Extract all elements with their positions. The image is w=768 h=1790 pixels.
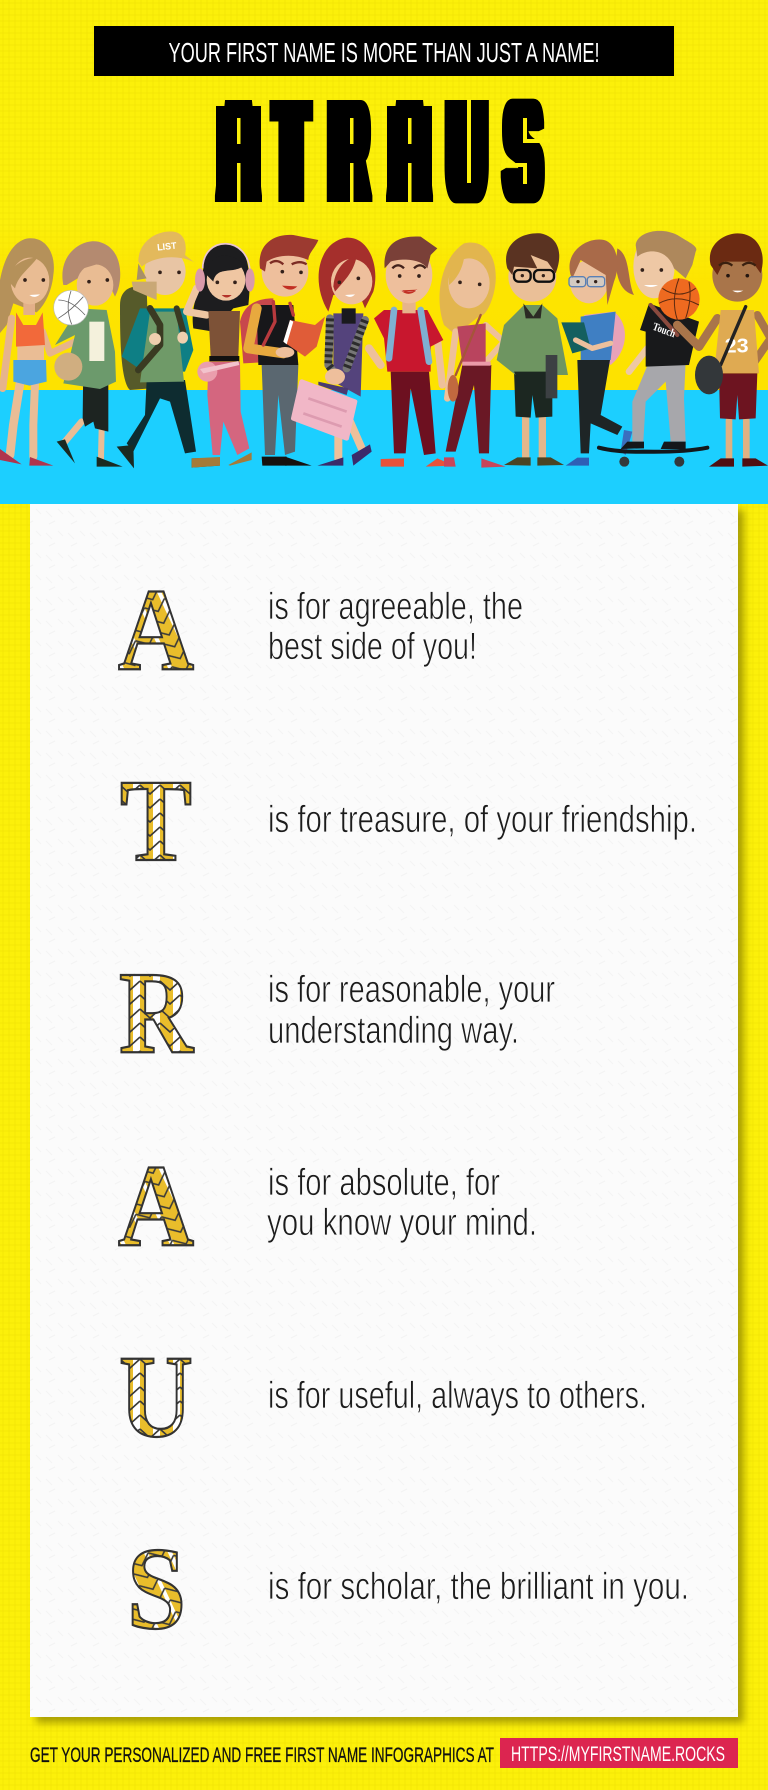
person: boy in red shirt <box>369 236 454 467</box>
white content panel <box>30 504 738 1717</box>
row: U <box>119 1331 647 1462</box>
text: reasonable: is for reasonable, your <box>268 969 555 1011</box>
white panel shadow <box>36 510 744 1723</box>
text: agreeable: is for agreeable, the <box>268 586 523 628</box>
footer link button <box>500 1738 738 1768</box>
row: S <box>127 1523 689 1654</box>
letter icon: R: R <box>119 947 195 1078</box>
blue band top cover <box>0 480 768 504</box>
person: boy on skateboard with basketball: Touch <box>651 321 677 340</box>
person: girl in orange top <box>0 238 78 466</box>
text: you know: you know your mind. <box>267 1202 537 1244</box>
left group of people <box>0 232 375 468</box>
row: T <box>120 755 697 886</box>
person: boy on skateboard with basketball <box>599 231 707 467</box>
text: useful: is for useful, always to others. <box>268 1375 647 1417</box>
text: best side: best side of you! <box>268 626 477 668</box>
row: A second <box>118 1140 537 1271</box>
text: understanding: understanding way. <box>268 1010 519 1052</box>
text: absolute: is for absolute, for <box>268 1162 500 1204</box>
blue floor band <box>0 390 768 504</box>
letter icon: A: A <box>118 564 194 695</box>
header banner <box>94 26 674 76</box>
row: A <box>118 564 523 695</box>
letter icon: T: T <box>120 755 192 886</box>
letter icon: S: S <box>127 1523 186 1654</box>
person: boy with book <box>240 235 325 466</box>
title: name: ATRAUS <box>224 73 537 229</box>
person: boy in tan jersey: 23 <box>725 334 749 357</box>
person: girl with ponytail and tablet <box>561 240 634 466</box>
person: girl with pink bag <box>293 238 375 466</box>
person: girl with volleyball <box>54 241 123 467</box>
deeper yellow band behind people <box>0 225 768 391</box>
row: R <box>119 947 555 1078</box>
people illustration <box>0 231 768 468</box>
person: boy with backpack and cap <box>117 232 220 468</box>
letter icon: A second: A <box>118 1140 194 1271</box>
person: boy in tan jersey <box>677 233 768 467</box>
letter icon: U: U <box>119 1331 193 1462</box>
person: girl with headphones <box>187 244 255 468</box>
person: boy with glasses <box>497 233 568 466</box>
footer call to action: GET YOUR PERSONALIZED AND FREE FIRST NAME INFOGRAPHICS AT <box>30 1744 494 1767</box>
person: boy with backpack and cap: LIST <box>157 241 177 253</box>
right group of people <box>369 231 768 468</box>
person: blonde girl <box>439 242 506 468</box>
